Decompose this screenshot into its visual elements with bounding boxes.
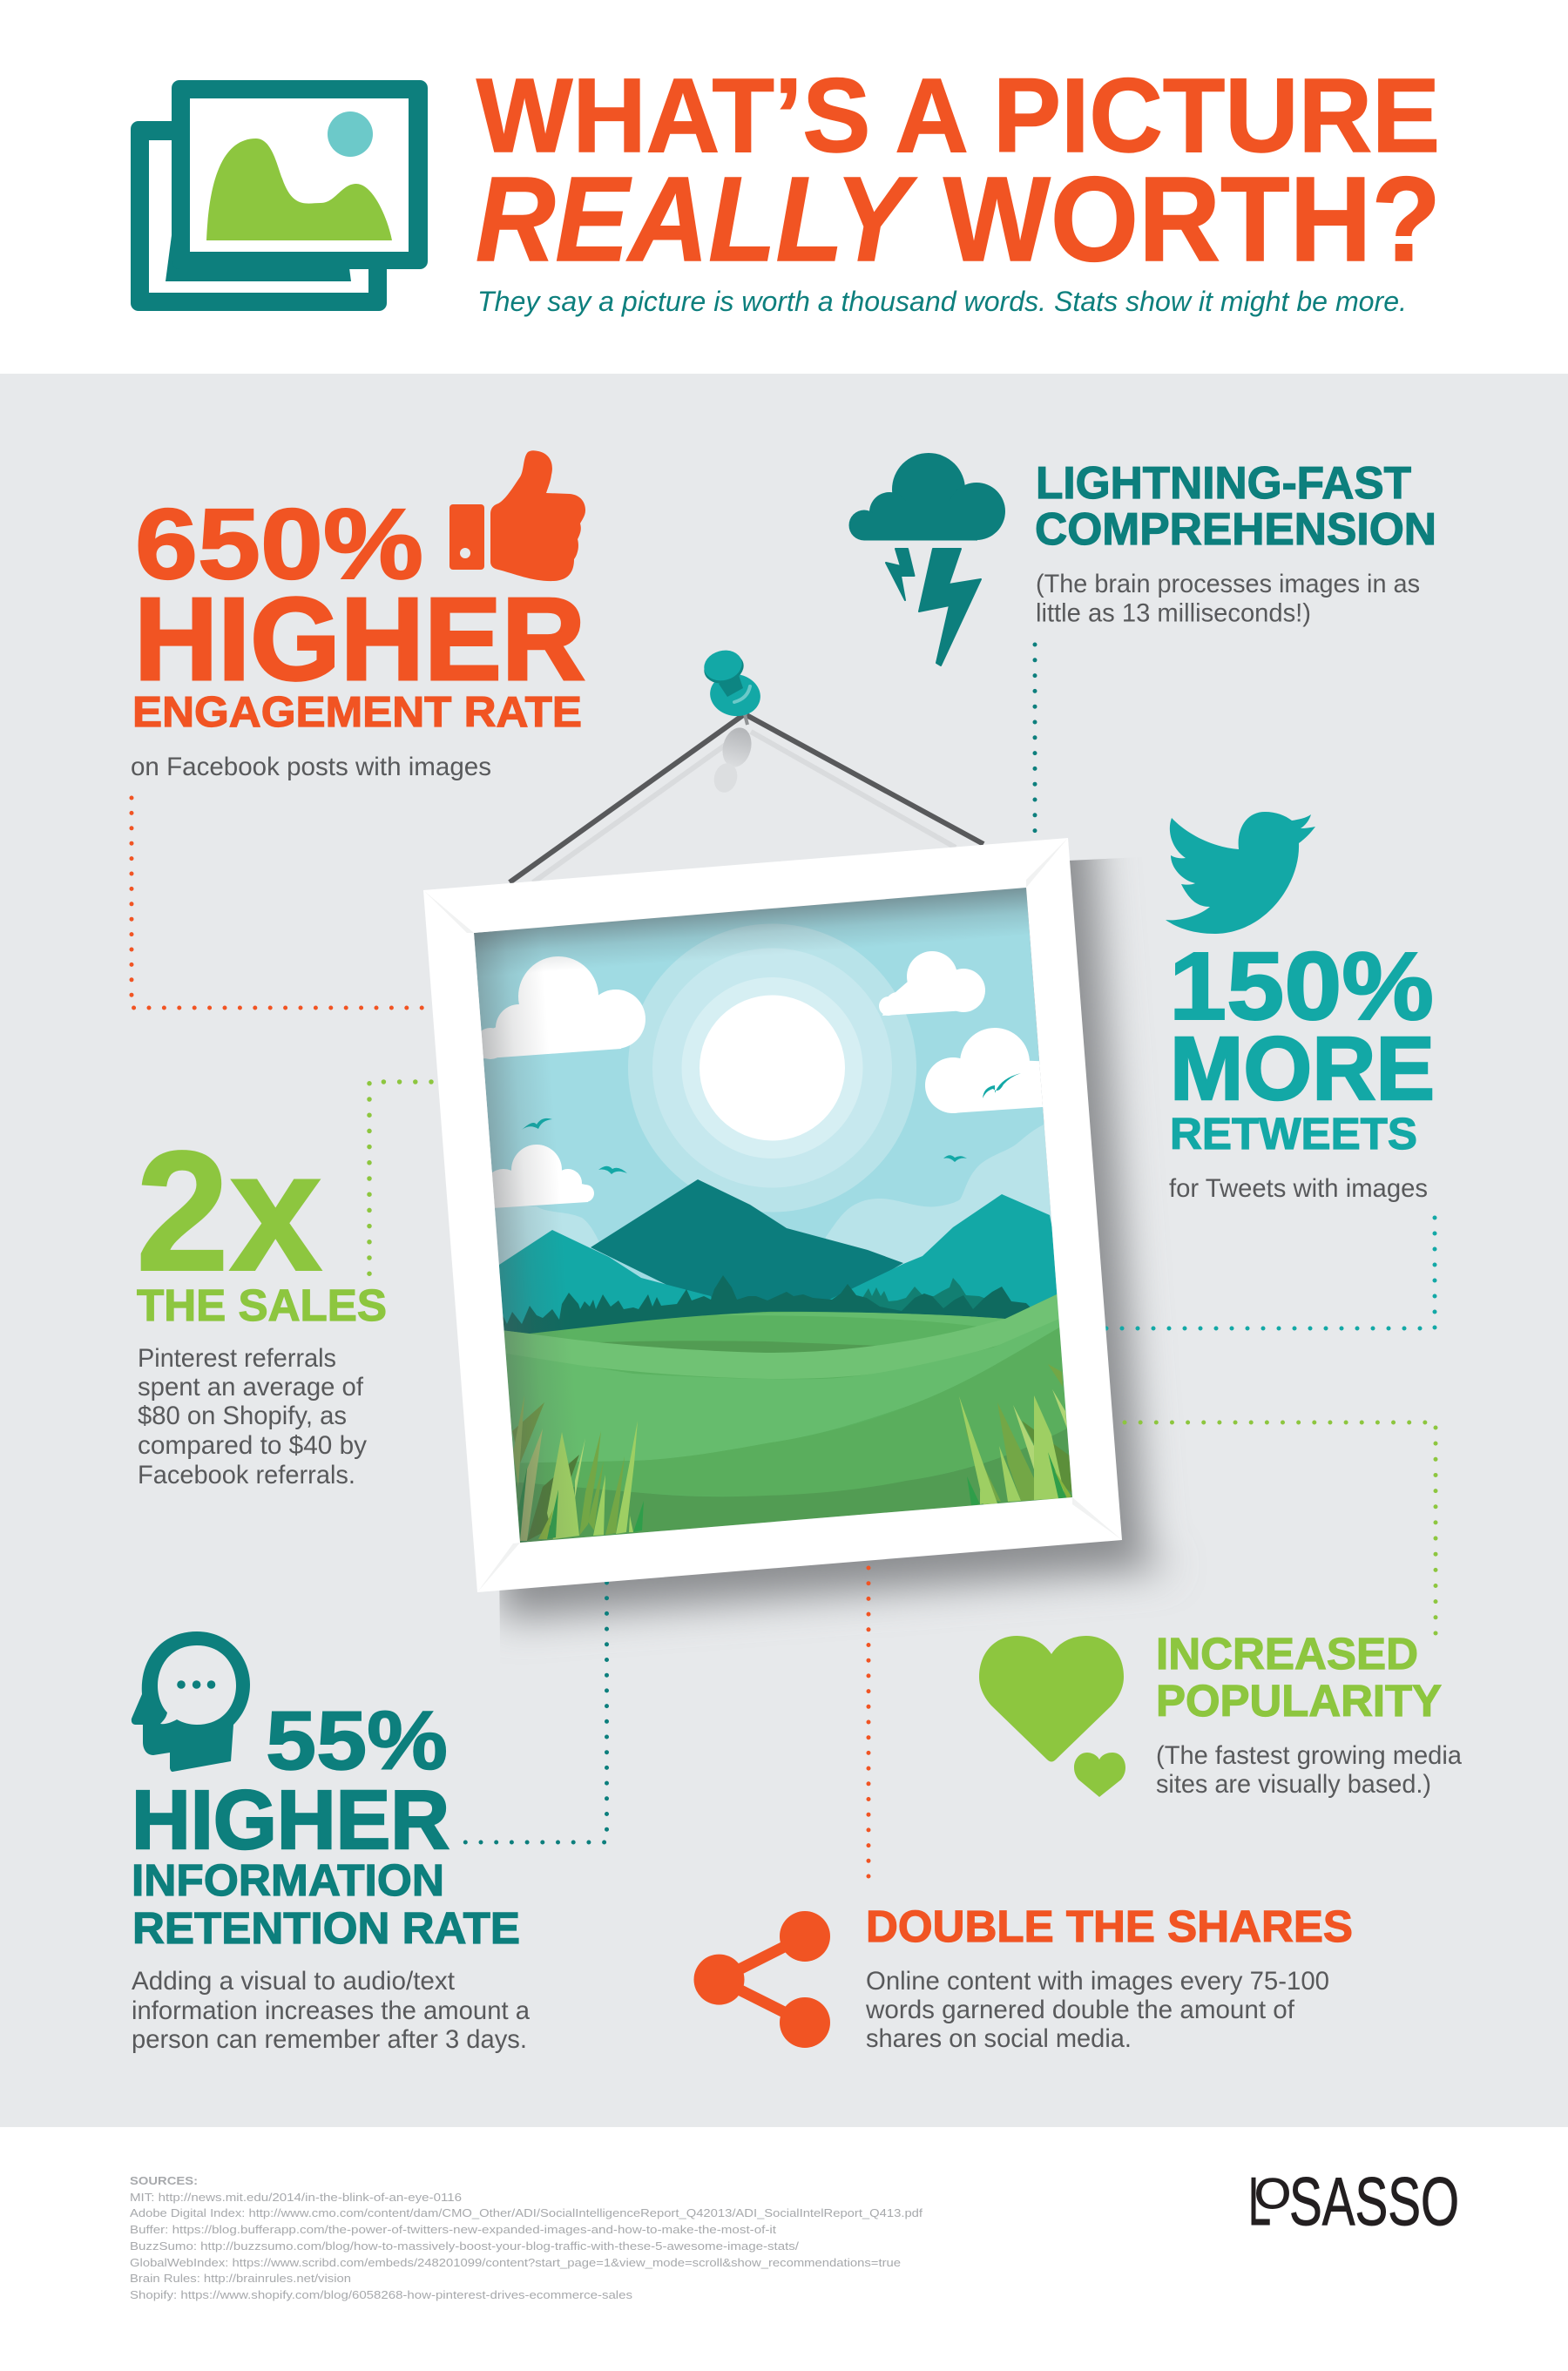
logo: Losasso: SASSO bbox=[1289, 2163, 1459, 2239]
body text: $80 on Shopify, as bbox=[138, 1402, 347, 1430]
sources: Shopify: https://www.shopify.com/blog/6058268-how-pinterest-drives-ecommerce-sales bbox=[130, 2288, 633, 2301]
subtitle: They say a picture is worth a thousand words. Stats show it might be more. bbox=[477, 286, 1407, 317]
body text: Adding a visual to audio/text bbox=[132, 1967, 456, 1996]
body text: compared to $40 by bbox=[138, 1431, 367, 1460]
icon: share bbox=[693, 1911, 830, 2048]
logo: Losasso: L bbox=[1248, 2163, 1271, 2239]
hanging wire bbox=[510, 715, 983, 882]
connector: orange lower bbox=[866, 1568, 871, 1877]
section: double the shares: shares on social media. bbox=[866, 2024, 1132, 2053]
sources: Adobe Digital Index: http://www.cmo.com/content/dam/CMO_Other/ADI/SocialIntelligenceReport_Q42013/ADI_SocialIntelReport_Q413.pdf bbox=[130, 2206, 923, 2219]
stat 55%: 55% bbox=[266, 1694, 448, 1787]
sources: MIT: http://news.mit.edu/2014/in-the-blink-of-an-eye-0116 bbox=[130, 2191, 462, 2204]
back hills bbox=[495, 1125, 1057, 1288]
title bbox=[476, 56, 1441, 287]
section: lightning-fast comprehension bbox=[848, 453, 1436, 665]
tree line bbox=[501, 1275, 1031, 1346]
body text: (The fastest growing media bbox=[1156, 1741, 1462, 1770]
sources: Brain Rules: http://brainrules.net/vision bbox=[130, 2272, 351, 2285]
heading: INCREASED bbox=[1156, 1629, 1418, 1679]
connector: orange upper bbox=[132, 798, 423, 1008]
heading: DOUBLE THE SHARES bbox=[866, 1902, 1353, 1951]
picture frame bbox=[423, 838, 1122, 1592]
connector: teal lower bbox=[464, 1583, 606, 1842]
label ENGAGEMENT RATE: ENGAGEMENT RATE bbox=[132, 689, 582, 736]
icon: thumbs up bbox=[449, 450, 585, 581]
body text: spent an average of bbox=[138, 1373, 364, 1402]
grass right bbox=[959, 1364, 1080, 1505]
wire shadows bbox=[533, 732, 956, 882]
stat 2x: 2x bbox=[136, 1116, 322, 1307]
section: 150% more retweets bbox=[1166, 812, 1435, 1203]
section: 650% engagement bbox=[131, 450, 585, 781]
icon: head with speech bubble bbox=[132, 1631, 250, 1772]
sky bbox=[474, 888, 1051, 1285]
frame shadow bbox=[493, 859, 1176, 1641]
body text: on Facebook posts with images bbox=[131, 753, 491, 781]
sources: SOURCES: bbox=[130, 2174, 198, 2187]
inner shadows bbox=[474, 888, 1029, 967]
fields bbox=[504, 1294, 1072, 1543]
section: 55% retention: person can remember after 3 days. bbox=[132, 2025, 527, 2054]
mountains bbox=[591, 1179, 903, 1307]
stat HIGHER: HIGHER bbox=[134, 573, 585, 705]
section: increased popularity: sites are visually based.) bbox=[1156, 1770, 1431, 1799]
body text: Pinterest referrals bbox=[138, 1344, 336, 1373]
title: WHAT’S A PICTURE bbox=[476, 56, 1440, 174]
heading: LIGHTNING-FAST bbox=[1036, 458, 1411, 509]
birds bbox=[522, 1073, 1021, 1174]
body text: for Tweets with images bbox=[1169, 1174, 1428, 1203]
section: increased popularity: POPULARITY bbox=[1156, 1676, 1442, 1726]
section: 55% retention: RETENTION RATE bbox=[132, 1903, 520, 1953]
logo: Losasso: O bbox=[1254, 2171, 1291, 2218]
stat HIGHER: HIGHER bbox=[132, 1773, 449, 1867]
connector: green left bbox=[369, 1082, 431, 1274]
title: WORTH? bbox=[943, 152, 1441, 287]
section: double the shares: words garnered double the amount of bbox=[865, 1996, 1295, 2024]
sources bbox=[130, 2174, 923, 2301]
sun bbox=[628, 923, 916, 1213]
stat 150%: 150% bbox=[1169, 933, 1434, 1040]
section: 55% retention: information increases the amount a bbox=[132, 1996, 530, 2025]
icon: stacked photos bbox=[131, 80, 428, 311]
clouds bbox=[475, 951, 1080, 1208]
section: 55% retention bbox=[132, 1631, 530, 2054]
logo: Losasso bbox=[1248, 2163, 1459, 2239]
section: lightning-fast comprehension: little as 13 milliseconds!) bbox=[1036, 599, 1311, 627]
connector: light teal right bbox=[1106, 1217, 1435, 1328]
label THE SALES: THE SALES bbox=[137, 1280, 387, 1330]
section: 2x the sales bbox=[136, 1116, 387, 1489]
lighter tree line bbox=[862, 1278, 984, 1311]
icon: storm cloud bbox=[848, 453, 1005, 665]
body text: Facebook referrals. bbox=[138, 1461, 355, 1489]
stat MORE: MORE bbox=[1170, 1018, 1435, 1118]
label: INFORMATION bbox=[132, 1855, 444, 1905]
body text: (The brain processes images in as bbox=[1036, 570, 1420, 598]
sources: Buffer: https://blog.bufferapp.com/the-power-of-twitters-new-expanded-images-and-how-to-make-the-most-of-it bbox=[130, 2223, 776, 2236]
connector: green right bbox=[1125, 1422, 1436, 1635]
section: double the shares bbox=[693, 1902, 1353, 2053]
section: lightning-fast comprehension: COMPREHENSION bbox=[1035, 504, 1436, 555]
icon: hearts bbox=[979, 1636, 1125, 1797]
body text: Online content with images every 75-100 bbox=[866, 1967, 1329, 1996]
connector: teal top bbox=[1033, 645, 1037, 833]
title: REALLY bbox=[476, 152, 917, 287]
icon: push pin bbox=[700, 646, 764, 795]
panel: grey background bbox=[0, 374, 1568, 2127]
sources: BuzzSumo: http://buzzsumo.com/blog/how-to-massively-boost-your-blog-traffic-with-these-5-awesome-image-stats/ bbox=[130, 2239, 799, 2253]
stat 650%: 650% bbox=[135, 489, 423, 600]
label RETWEETS: RETWEETS bbox=[1170, 1109, 1417, 1158]
icon: twitter bird bbox=[1166, 812, 1315, 934]
body text bbox=[138, 1344, 367, 1489]
section: increased popularity bbox=[979, 1629, 1462, 1799]
picture: landscape scene bbox=[462, 884, 1098, 1559]
grass left bbox=[512, 1395, 644, 1542]
sources: GlobalWebIndex: https://www.scribd.com/embeds/248201099/content?start_page=1&view_mode=scroll&show_recommendations=true bbox=[130, 2256, 901, 2269]
